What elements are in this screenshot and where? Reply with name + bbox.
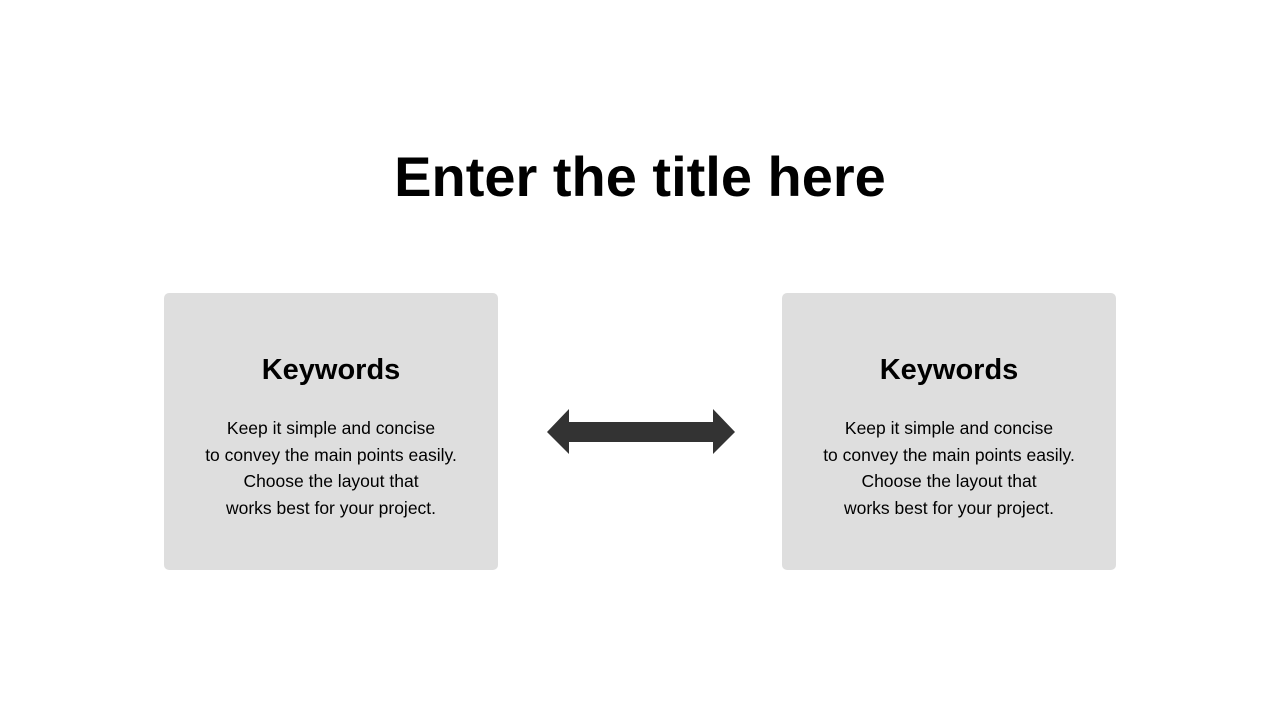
title: Enter the title here	[394, 145, 886, 208]
panel: left keywords	[164, 293, 498, 570]
text block: right description: Choose the layout that	[861, 471, 1037, 491]
arrow: double-headed	[547, 409, 735, 454]
panel: right keywords	[782, 293, 1116, 570]
text block: right description: Keep it simple and concise	[845, 418, 1053, 438]
text block: right description: works best for your project.	[844, 498, 1054, 518]
heading: right keywords: Keywords	[880, 354, 1018, 386]
text block: left description: to convey the main points easily.	[205, 445, 457, 465]
text block: right description	[823, 418, 1075, 518]
text block: right description: to convey the main points easily.	[823, 445, 1075, 465]
text block: left description: Keep it simple and concise	[227, 418, 435, 438]
text block: left description	[205, 418, 457, 518]
text block: left description: Choose the layout that	[243, 471, 419, 491]
heading: left keywords: Keywords	[262, 354, 400, 386]
text block: left description: works best for your project.	[226, 498, 436, 518]
